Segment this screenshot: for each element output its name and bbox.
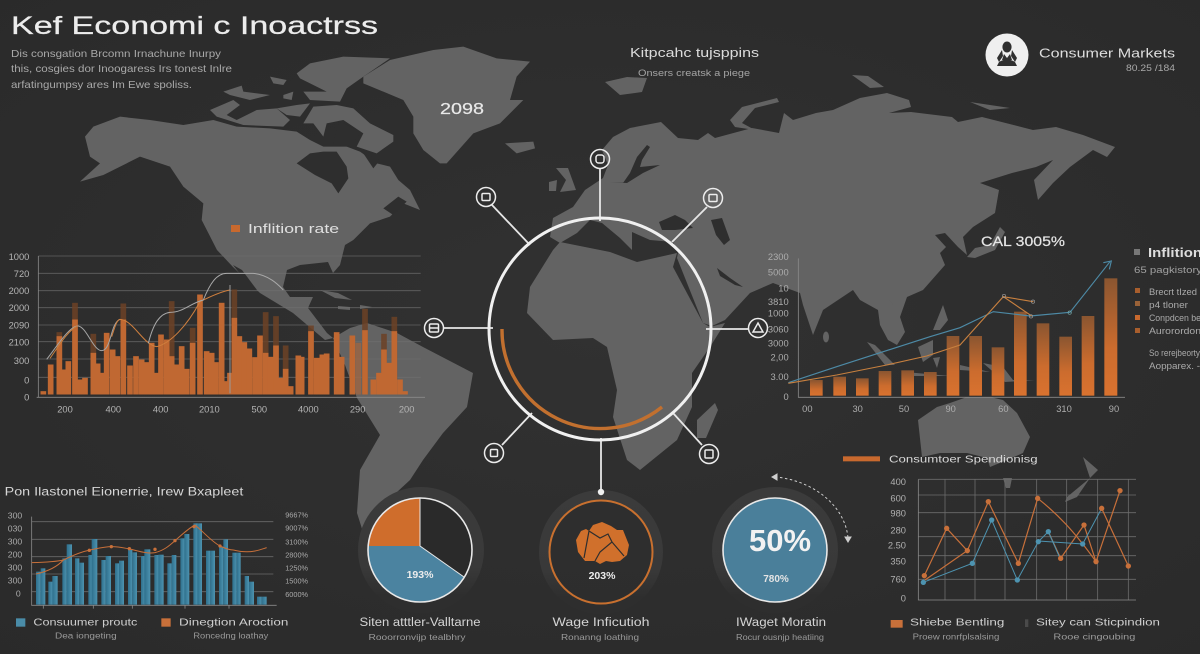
Southeast Asia islands <box>867 227 1035 422</box>
Sri Lanka <box>823 332 829 342</box>
axis labels: 300 <box>8 510 22 520</box>
Caribbean islands <box>320 290 372 310</box>
title: Kef Economi c Inoactrss <box>11 12 378 40</box>
pie chart card: 193% <box>407 569 434 581</box>
axis labels: 300 <box>14 356 29 366</box>
North America and Arctic <box>80 47 535 340</box>
axis labels: 350 <box>890 556 906 566</box>
bottom left chart: blue bars: Consuumer proutc <box>33 618 137 629</box>
Madagascar <box>697 403 718 438</box>
bars <box>36 523 267 605</box>
axis labels: 720 <box>14 269 29 279</box>
wage margin card: 780% <box>763 574 789 585</box>
right legend: Inflition <box>1148 245 1200 260</box>
bottom left chart: blue bars <box>5 485 309 641</box>
top centre caption: Onsers creatsk a piege <box>638 68 750 79</box>
outer ring <box>364 493 478 607</box>
inflation rate label: Inflition rate <box>248 221 339 236</box>
axis labels: 1000 <box>768 309 789 319</box>
outer ring <box>544 495 658 609</box>
intro text: this, cosgies dor Inoogaress Irs tonest Inlre <box>11 64 232 75</box>
right legend: Aopparex. - <box>1149 361 1200 371</box>
bottom left chart: blue bars: Dinegtion Aroction <box>179 618 289 629</box>
Arctic Eurasian islands <box>605 75 1010 130</box>
bright bars <box>41 295 407 394</box>
consumer spending line chart: Shiebe Bentling <box>910 618 1005 629</box>
consumer markets badge: Consumer Markets <box>1039 46 1176 60</box>
axis labels: 2000 <box>9 303 29 313</box>
consumer spending line chart: Sitey can Sticpindion <box>1036 618 1160 629</box>
axis labels: 760 <box>890 575 906 585</box>
left bar chart: inflation: 290 <box>350 405 365 415</box>
consumer spending line chart: Rooe cingoubing <box>1053 632 1135 641</box>
trend lines <box>788 261 1111 383</box>
bottom left chart: blue bars: 6000% <box>285 590 309 599</box>
bottom left chart: blue bars: 1500% <box>285 577 309 586</box>
left bar chart: inflation: 400 <box>106 405 121 415</box>
axis labels: 300 <box>8 562 22 572</box>
axis labels: 0 <box>24 375 29 385</box>
grid <box>918 479 1136 600</box>
bottom left chart: blue bars: 2800% <box>285 551 309 560</box>
trend line <box>32 525 267 574</box>
axis labels: 600 <box>890 494 906 504</box>
right legend: Aurorordon <box>1149 326 1200 336</box>
left bar chart: inflation: 2010 <box>199 405 220 415</box>
left bar chart: inflation: 500 <box>252 405 267 415</box>
trend lines <box>47 273 283 393</box>
right legend: Brecrt tIzed <box>1149 287 1197 297</box>
axis labels <box>9 252 29 403</box>
consumer spending line chart <box>843 454 1160 641</box>
axis labels: 0 <box>901 593 906 603</box>
bottom left chart: blue bars: 9667% <box>285 510 309 519</box>
wage inflation card: Wage Inficutioh <box>552 617 650 629</box>
axis labels: 400 <box>890 477 906 487</box>
wage inflation card <box>544 489 658 642</box>
icon node: bottom right <box>700 444 718 464</box>
consumer spending line chart: Consumtoer Spendionisg <box>889 454 1038 465</box>
axis labels: 10 <box>778 284 789 294</box>
bars <box>810 278 1117 396</box>
wage inflation card: Ronanng loathing <box>561 632 639 642</box>
consumer spending line chart: Proew ronrfplsalsing <box>913 632 999 641</box>
left bar chart: inflation: 4000 <box>298 405 319 415</box>
intro text <box>11 49 232 91</box>
orange arc <box>502 329 662 429</box>
bottom left chart: blue bars: Dea iongeting <box>55 632 117 641</box>
left bar chart: inflation: 200 <box>57 405 73 415</box>
pie chart card: Rooorronvijp tealbhry <box>368 632 466 642</box>
axis labels: 2.50 <box>888 540 906 550</box>
consumer markets badge: 80.25 /184 <box>1126 63 1175 74</box>
right bar chart: 90 <box>945 404 956 414</box>
CAL value: CAL 3005% <box>981 233 1065 249</box>
dark back bars <box>57 290 397 394</box>
right bar chart: 30 <box>852 404 863 414</box>
icon node: right <box>748 318 768 338</box>
left bar chart: inflation: 200 <box>399 405 414 415</box>
axis labels <box>888 477 906 603</box>
British Isles <box>549 168 576 192</box>
top centre caption <box>630 45 760 79</box>
axis labels: 980 <box>890 509 906 519</box>
Australia <box>918 397 1030 467</box>
icon node: left <box>424 318 444 338</box>
right bar chart: 00 <box>802 404 813 414</box>
right legend: p4 tloner <box>1149 300 1188 310</box>
axis labels: 280 <box>890 525 906 535</box>
legend <box>16 618 25 627</box>
Africa <box>527 242 725 470</box>
icon node: top <box>590 150 610 168</box>
right bar chart: 50 <box>899 404 909 414</box>
outer ring <box>718 493 832 607</box>
wage margin card: IWaget Moratin <box>736 617 826 629</box>
dashed arrow <box>772 474 851 542</box>
inland seas <box>233 145 743 290</box>
pie chart card <box>360 493 480 642</box>
chart heading <box>843 456 880 461</box>
right bar chart <box>768 252 1125 414</box>
axis labels: 5000 <box>768 267 789 277</box>
consumer markets badge <box>986 34 1176 76</box>
axis labels: 030 <box>8 523 22 533</box>
axis labels: 200 <box>8 550 22 560</box>
icon: orange cluster <box>576 522 629 564</box>
icon node: bottom left <box>484 444 504 462</box>
left bar chart: inflation <box>9 252 425 415</box>
axis labels: 1000 <box>9 252 29 262</box>
world map <box>80 47 1115 532</box>
blue series <box>923 508 1102 582</box>
axis labels: 2300 <box>768 252 789 262</box>
left bar chart: inflation: 400 <box>153 405 168 415</box>
bottom left chart: blue bars: Roncedng loathay <box>193 632 268 641</box>
axis labels: 2,00 <box>771 352 789 362</box>
axis labels <box>768 252 789 402</box>
top centre caption: Kitpcahc tujsppins <box>630 45 760 60</box>
central globe hub <box>424 150 768 492</box>
axis labels: 0 <box>16 589 21 599</box>
right legend: 65 pagkistory <box>1134 265 1200 276</box>
right legend <box>1134 245 1200 371</box>
wage margin card <box>718 474 851 642</box>
Eurasia <box>550 93 1115 345</box>
axis labels: 2100 <box>9 338 29 348</box>
axis labels: 3810 <box>768 297 789 307</box>
axis labels: 3000 <box>768 338 789 348</box>
axis labels <box>8 510 22 599</box>
wage margin card: Rocur ousnjp heatiing <box>736 632 824 642</box>
Greenland <box>363 47 530 163</box>
pie <box>368 498 472 602</box>
right bar chart: 60 <box>998 404 1009 414</box>
icon: people <box>986 34 1028 76</box>
intro text: Dis consgation Brcomn Irnachune Inurpy <box>11 49 222 60</box>
globe ring <box>489 218 711 440</box>
bottom left chart: blue bars: 1250% <box>285 563 309 572</box>
chart heading: Pon Ilastonel Eionerrie, Irew Bxapleet <box>5 485 244 498</box>
axis labels: 0 <box>24 393 29 403</box>
Iceland <box>505 142 535 153</box>
axis labels: 0 <box>783 392 789 402</box>
South America <box>333 323 473 532</box>
axis labels: 300 <box>8 575 22 585</box>
Tasmania and New Zealand <box>1003 457 1098 502</box>
wage inflation card: 203% <box>589 570 616 582</box>
axis labels: 3060 <box>768 324 789 334</box>
icon node: top right <box>704 188 722 208</box>
icon node: top left <box>476 188 496 206</box>
wage margin card: 50% <box>749 523 811 558</box>
connector lines <box>443 169 749 492</box>
bottom left chart: blue bars: 3100% <box>285 537 309 546</box>
axis labels: 2090 <box>9 321 29 331</box>
axis labels: 3.00 <box>771 372 789 382</box>
inflation rate label <box>231 221 339 236</box>
orange series <box>924 491 1128 580</box>
intro text: arfatingumpsy ares Im Ewe spoliss. <box>11 80 192 91</box>
axis labels: 300 <box>8 536 22 546</box>
axis labels: 2000 <box>9 286 29 296</box>
right bar chart: 90 <box>1109 404 1119 414</box>
year label: 2098 <box>440 101 484 118</box>
legend <box>891 620 903 628</box>
right bar chart: 310 <box>1056 404 1072 414</box>
bottom left chart: blue bars: 9007% <box>285 524 309 533</box>
pie chart card: Siten atttler-Valltarne <box>360 617 480 629</box>
